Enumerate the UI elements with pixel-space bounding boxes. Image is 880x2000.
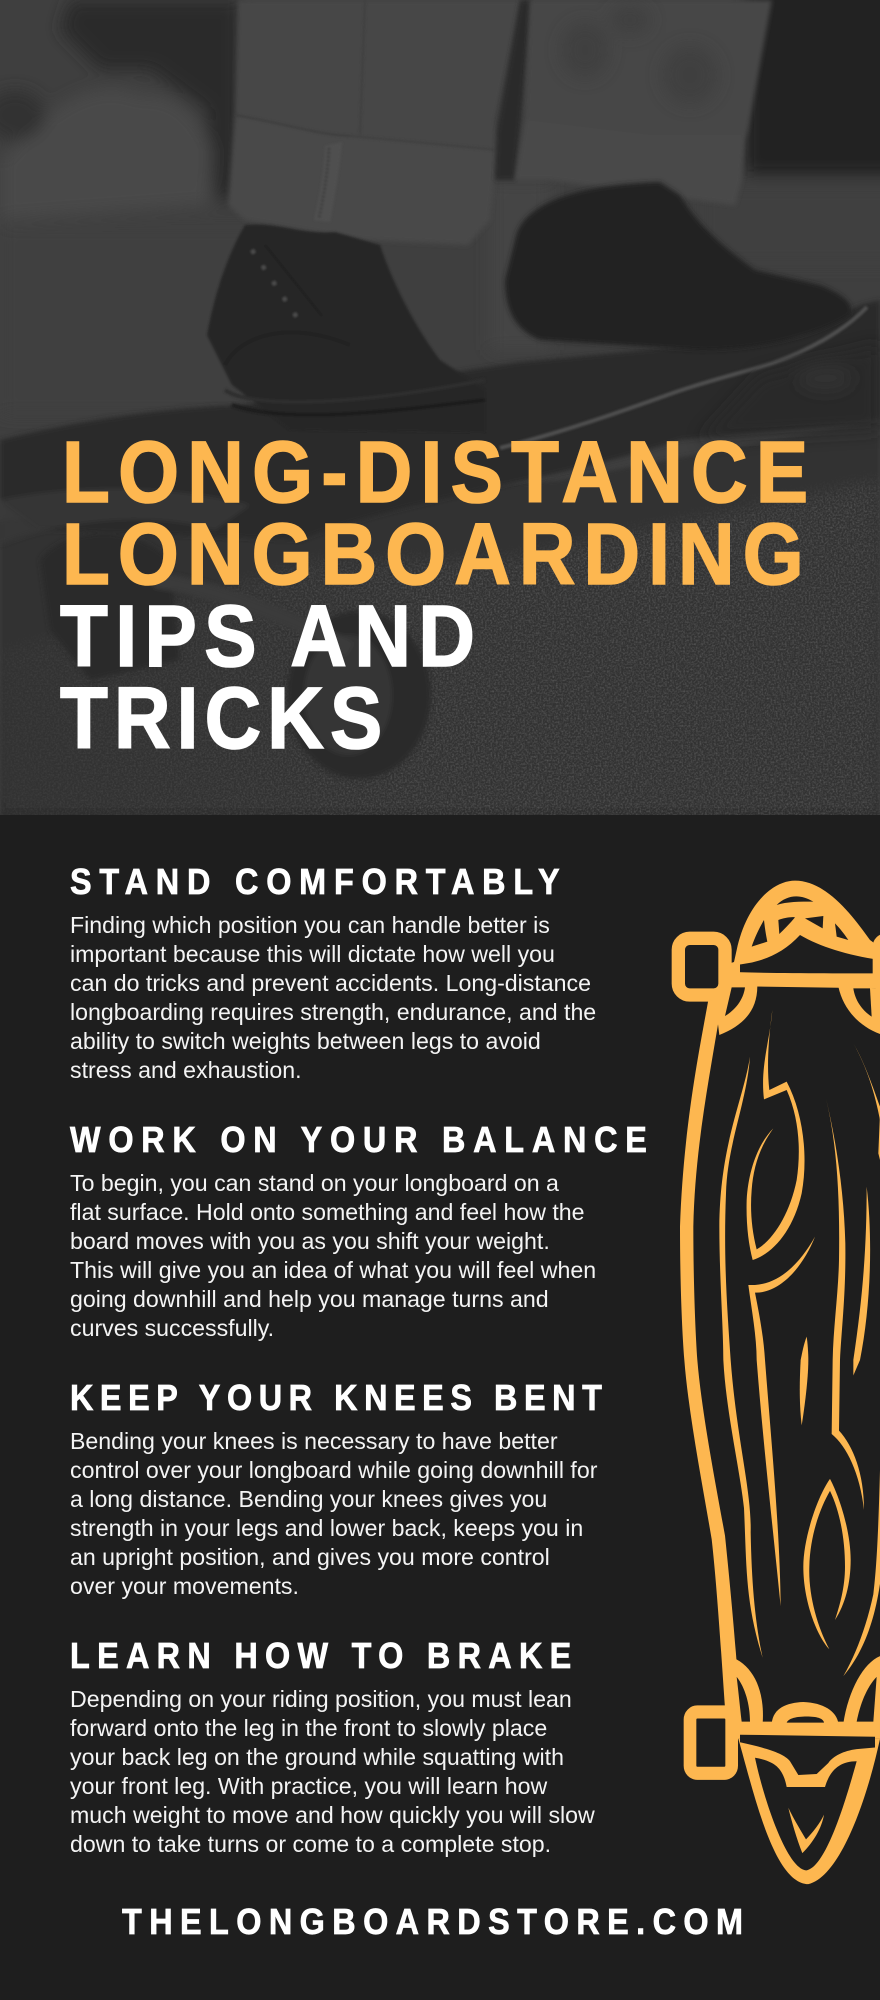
body text: strength in your legs and lower back, keeps you in (70, 1515, 583, 1541)
board top half (678, 881, 880, 1360)
body text: important because this will dictate how well you (70, 941, 555, 967)
tail-side wheel arcs (715, 986, 757, 1035)
body text: can do tricks and prevent accidents. Long-distance (70, 970, 591, 996)
footer website: THELONGBOARDSTORE.COM (122, 1902, 743, 1942)
body text: stress and exhaustion. (70, 1057, 302, 1083)
body text: Depending on your riding position, you must lean (70, 1686, 572, 1712)
title line 4: TRICKS (60, 669, 382, 767)
body text (70, 1170, 596, 1341)
gap between legs (495, 0, 532, 180)
body text: board moves with you as you shift your weight. (70, 1228, 550, 1254)
body text: Bending your knees is necessary to have better (70, 1428, 558, 1454)
truck tab (690, 1712, 732, 1773)
hero photo: longboarder's feet on a board (0, 0, 880, 830)
tail (738, 1739, 880, 1884)
heading: STAND COMFORTABLY (70, 862, 560, 902)
blurred background (0, 0, 880, 214)
body text: going downhill and help you manage turns and (70, 1286, 549, 1312)
icon: longboard illustration (678, 881, 880, 1884)
board edge highlight (500, 307, 867, 448)
wheel arcs (727, 1656, 763, 1723)
body text: This will give you an idea of what you will feel when (70, 1257, 596, 1283)
title line 2: LONGBOARDING (62, 505, 804, 603)
heading: KEEP YOUR KNEES BENT (70, 1378, 602, 1418)
rail (680, 1000, 722, 1360)
body text: down to take turns or come to a complete stop. (70, 1831, 551, 1857)
body text: forward onto the leg in the front to slowly place (70, 1715, 547, 1741)
section: stand comfortably (70, 862, 596, 1083)
body text: a long distance. Bending your knees gives you (70, 1486, 547, 1512)
body text: curves successfully. (70, 1315, 274, 1341)
body text: much weight to move and how quickly you will slow (70, 1802, 595, 1828)
road (0, 420, 880, 830)
grain lines (747, 1010, 805, 1260)
body text: flat surface. Hold onto something and feel how the (70, 1199, 585, 1225)
trousers: front leg (228, 0, 522, 245)
body text: an upright position, and gives you more control (70, 1544, 550, 1570)
body text: your front leg. With practice, you will learn how (70, 1773, 547, 1799)
front shoe (207, 225, 485, 432)
heading: LEARN HOW TO BRAKE (70, 1636, 571, 1676)
body text: Finding which position you can handle better is (70, 912, 550, 938)
trousers: rear leg (515, 0, 772, 205)
body text: ability to switch weights between legs to avoid (70, 1028, 541, 1054)
trouser blotches (561, 5, 718, 105)
nose (733, 881, 880, 965)
body text (70, 912, 596, 1083)
title line 1: LONG-DISTANCE (62, 423, 808, 521)
rear shoe (505, 182, 851, 350)
content panel background (0, 815, 880, 2000)
section: learn how to brake (70, 1636, 595, 1857)
board bottom half (684, 1360, 880, 1884)
section: keep your knees bent (70, 1378, 602, 1599)
road grain (0, 460, 880, 825)
body text: your back leg on the ground while squatting with (70, 1744, 564, 1770)
heading: WORK ON YOUR BALANCE (70, 1120, 647, 1160)
body text (70, 1428, 598, 1599)
body text: longboarding requires strength, endurance, and the (70, 999, 596, 1025)
rail (684, 1360, 740, 1708)
truck tabs (678, 938, 725, 995)
body text (70, 1686, 595, 1857)
board deck and wheel (0, 300, 880, 779)
title (60, 423, 808, 767)
section: work on your balance (70, 1120, 647, 1341)
body text: control over your longboard while going downhill for (70, 1457, 598, 1483)
grain lines (723, 1360, 763, 1658)
blurred right background under board (723, 422, 874, 438)
body text: over your movements. (70, 1573, 299, 1599)
body text: To begin, you can stand on your longboard on a (70, 1170, 559, 1196)
title line 3: TIPS AND (60, 587, 475, 685)
